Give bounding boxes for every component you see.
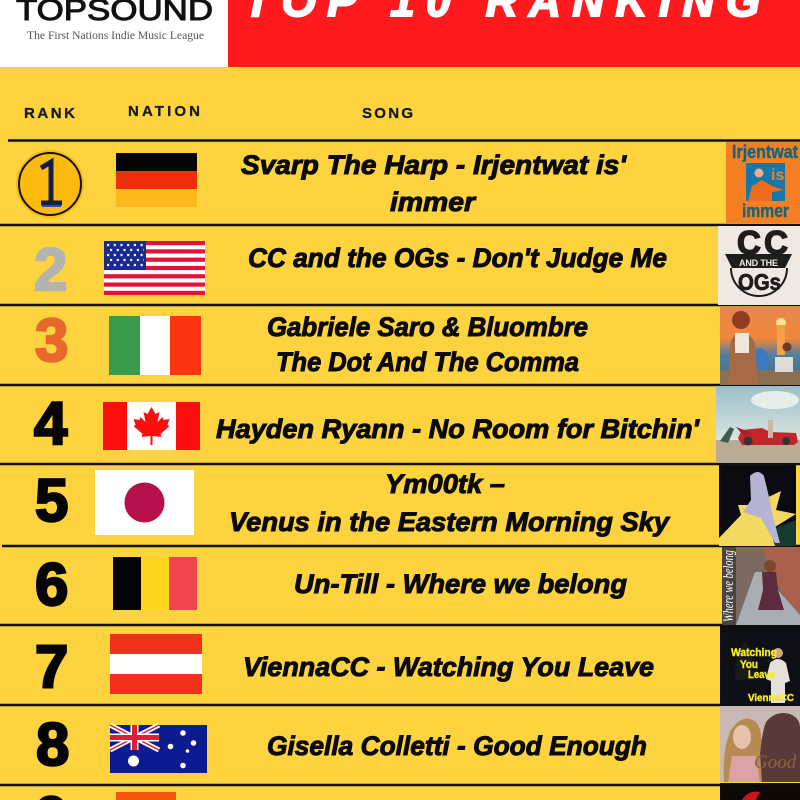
cover 7: You [740, 659, 758, 671]
flag: Canada [103, 402, 200, 450]
cover 9 [720, 783, 800, 800]
song titles: immer [390, 187, 477, 217]
flag: row 9 [116, 792, 176, 800]
cover 2: CC [737, 224, 788, 261]
cover 7 [720, 626, 800, 705]
flag: Japan [95, 470, 194, 535]
rank numbers: 6 [35, 551, 68, 618]
logo panel [0, 0, 228, 67]
logo tagline: The First Nations Indie Music League [27, 28, 204, 42]
cover 8: Good [754, 752, 797, 773]
song titles: Svarp The Harp - Irjentwat is' [241, 150, 628, 180]
cover 7: Leave [748, 669, 775, 681]
column headers: NATION [128, 103, 200, 120]
rank numbers: 2 [34, 236, 67, 303]
cover 7: Watching [731, 647, 777, 659]
rank numbers: 5 [35, 467, 68, 534]
rank numbers: 3 [35, 307, 68, 374]
flag: USA [104, 241, 205, 295]
cover 1: is [771, 167, 784, 184]
flag: Belgium [113, 557, 197, 610]
cover 1: immer [742, 201, 789, 221]
song titles: CC and the OGs - Don't Judge Me [248, 243, 667, 273]
cover 2: AND THE [739, 258, 778, 268]
cover 8 [720, 706, 800, 782]
song titles: Hayden Ryann - No Room for Bitchin' [216, 414, 701, 444]
cover 2 [718, 224, 800, 305]
song titles: Gabriele Saro & Bluombre [267, 312, 588, 342]
rank numbers: 4 [34, 390, 68, 457]
column headers: SONG [362, 105, 413, 122]
flag: Germany [116, 153, 197, 207]
song titles: Ym00tk – [385, 469, 505, 499]
title banner [228, 0, 800, 67]
rank 1 badge [16, 150, 84, 218]
cover 6: Where we belong [721, 550, 737, 622]
rank numbers [34, 236, 69, 778]
cover 6 [721, 547, 800, 625]
song titles: ViennaCC - Watching You Leave [243, 652, 654, 682]
cover 4 [716, 386, 800, 463]
cover 1 [726, 142, 800, 223]
song titles: Venus in the Eastern Morning Sky [229, 507, 671, 537]
column headers: RANK [24, 105, 75, 122]
cover 7: ViennaCC [748, 693, 794, 704]
cover 2: OGs [738, 269, 781, 295]
cover 5 [719, 465, 796, 546]
song titles [216, 150, 701, 761]
flag: Austria [110, 634, 202, 694]
song titles: Gisella Colletti - Good Enough [267, 731, 647, 761]
rank numbers: 7 [35, 633, 68, 700]
song titles: The Dot And The Comma [276, 347, 579, 377]
cover 3 [720, 307, 800, 385]
column headers [24, 103, 413, 122]
song titles: Un-Till - Where we belong [294, 569, 628, 599]
rank numbers: 8 [36, 711, 69, 778]
flag: Australia [110, 725, 207, 773]
flag: Italy [109, 316, 201, 375]
